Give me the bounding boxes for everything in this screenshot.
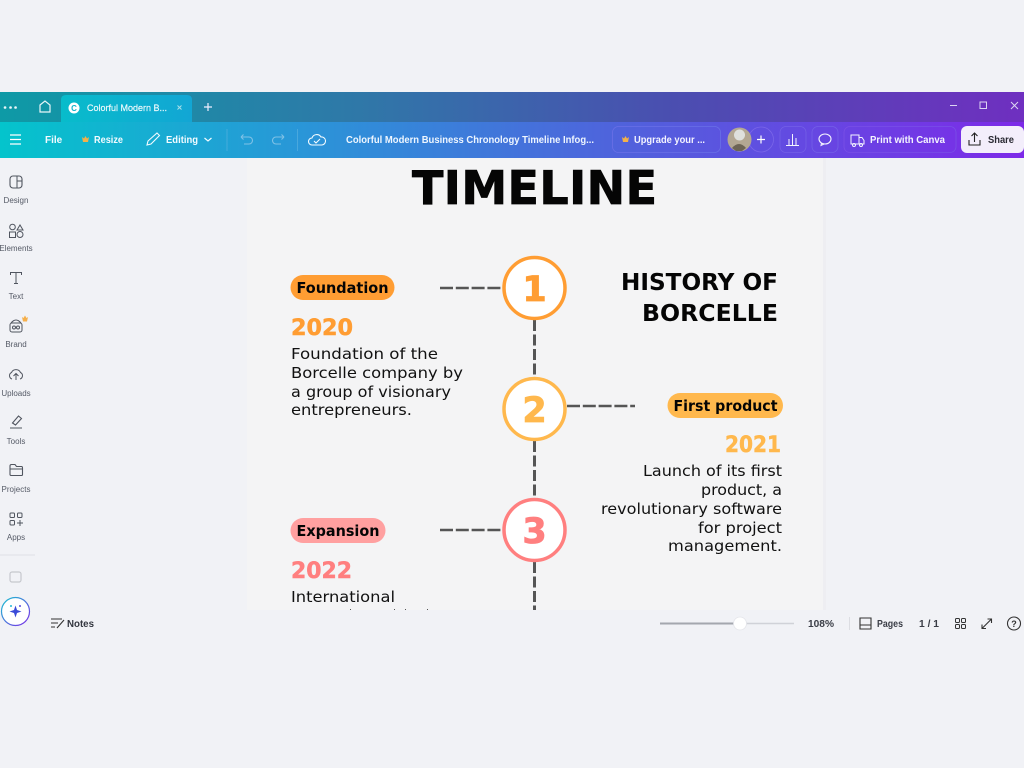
menu dots [5, 106, 16, 109]
page count: 1 / 1 [919, 619, 939, 630]
node 3 [504, 500, 565, 560]
notes [51, 619, 94, 630]
active tab [61, 95, 192, 122]
analytics button [780, 126, 806, 152]
active tab: Colorful Modern B... [87, 103, 167, 114]
node 2 [504, 378, 565, 440]
event 3: Expansion [290, 518, 395, 606]
upgrade button [612, 126, 720, 152]
badge: Expansion: Expansion [296, 522, 380, 540]
node 1 [504, 258, 565, 318]
footer bar [51, 617, 1020, 630]
editing: Editing [166, 135, 198, 146]
zoom level: 108% [808, 619, 834, 630]
node 3: 3 [522, 512, 547, 552]
nav: Apps [7, 513, 25, 542]
description 1 [291, 345, 463, 419]
description 1: entrepreneurs. [291, 401, 412, 419]
file menu: File [45, 135, 63, 146]
event 2: First product [601, 393, 783, 555]
description 2 [601, 462, 782, 555]
node 2: 2 [522, 391, 547, 431]
share button: Share [988, 135, 1014, 146]
icon: grid [956, 618, 966, 628]
icon: hamburger [10, 135, 21, 144]
icon: help [1008, 617, 1020, 630]
icon: image generator disabled [10, 572, 21, 582]
description 2: product, a [701, 481, 782, 499]
new tab plus [204, 103, 212, 111]
window controls [950, 102, 1018, 109]
nav: Projects [2, 464, 30, 494]
icon: home [40, 101, 50, 112]
timeline spine [533, 320, 536, 611]
description 2: for project [698, 519, 782, 537]
description 2: Launch of its first [643, 462, 782, 480]
description 2: revolutionary software [601, 500, 782, 518]
zoom slider [660, 617, 794, 630]
icon: help: ? [1011, 619, 1017, 629]
nav: Text: Text [9, 292, 24, 301]
nav: Uploads: Uploads [1, 389, 31, 398]
bottom bar cover [0, 610, 1024, 768]
description 1: Borcelle company by [291, 364, 463, 382]
icon: fullscreen [982, 619, 992, 628]
nav: Uploads [1, 370, 31, 398]
undo redo [241, 134, 284, 144]
connector 2 [567, 405, 635, 407]
nav: Tools [7, 416, 25, 446]
resize: Resize [94, 135, 123, 146]
heading: history of Borcelle: BORCELLE [642, 301, 778, 327]
print with Canva button [844, 126, 956, 152]
print with Canva button: Print with Canva [870, 135, 945, 146]
badge: Foundation: Foundation [296, 279, 388, 297]
nav: Text [9, 272, 24, 301]
nav: Design [4, 176, 28, 205]
browser tab bar [0, 92, 1024, 122]
nav: Brand [5, 316, 28, 349]
share button [961, 126, 1024, 153]
document title: Colorful Modern Business Chronology Timeline Infog... [346, 135, 594, 146]
nav: Apps: Apps [7, 533, 25, 542]
notes: Notes [67, 619, 94, 630]
canvas page [247, 150, 826, 611]
left sidebar [0, 158, 36, 626]
year 2021: 2021 [725, 433, 781, 458]
event 1: Foundation [290, 275, 463, 419]
AI assistant button [2, 598, 30, 626]
resize [82, 135, 123, 146]
active tab: C [71, 104, 77, 113]
avatar and add [728, 127, 774, 152]
connector 1 [440, 287, 503, 289]
badge: First product [668, 393, 783, 418]
title: TIMELINE [412, 161, 657, 215]
pages: Pages [877, 619, 903, 630]
icon: cloud saved [308, 135, 326, 145]
comment button [812, 126, 838, 152]
description 1: a group of visionary [291, 383, 451, 401]
nav: Design: Design [4, 196, 28, 205]
year 2020: 2020 [291, 316, 353, 341]
nav: Tools: Tools [7, 437, 25, 446]
connector 3 [440, 529, 503, 531]
description 2: management. [668, 537, 782, 555]
description 3: International [291, 588, 395, 606]
description 1: Foundation of the [291, 345, 438, 363]
editor toolbar [0, 122, 1024, 158]
badge: Foundation [290, 275, 394, 300]
heading: history of Borcelle: HISTORY OF [621, 270, 778, 296]
nav: Elements [0, 224, 33, 253]
nav: Brand: Brand [5, 340, 27, 349]
pages [860, 618, 903, 630]
badge: First product: First product [674, 397, 778, 415]
node 1: 1 [522, 270, 547, 310]
editing [147, 133, 212, 146]
heading: history of Borcelle [621, 270, 778, 327]
nav: Elements: Elements [0, 244, 33, 253]
upgrade button: Upgrade your ... [634, 135, 705, 146]
year 2022: 2022 [291, 559, 352, 584]
nav: Projects: Projects [2, 485, 30, 494]
